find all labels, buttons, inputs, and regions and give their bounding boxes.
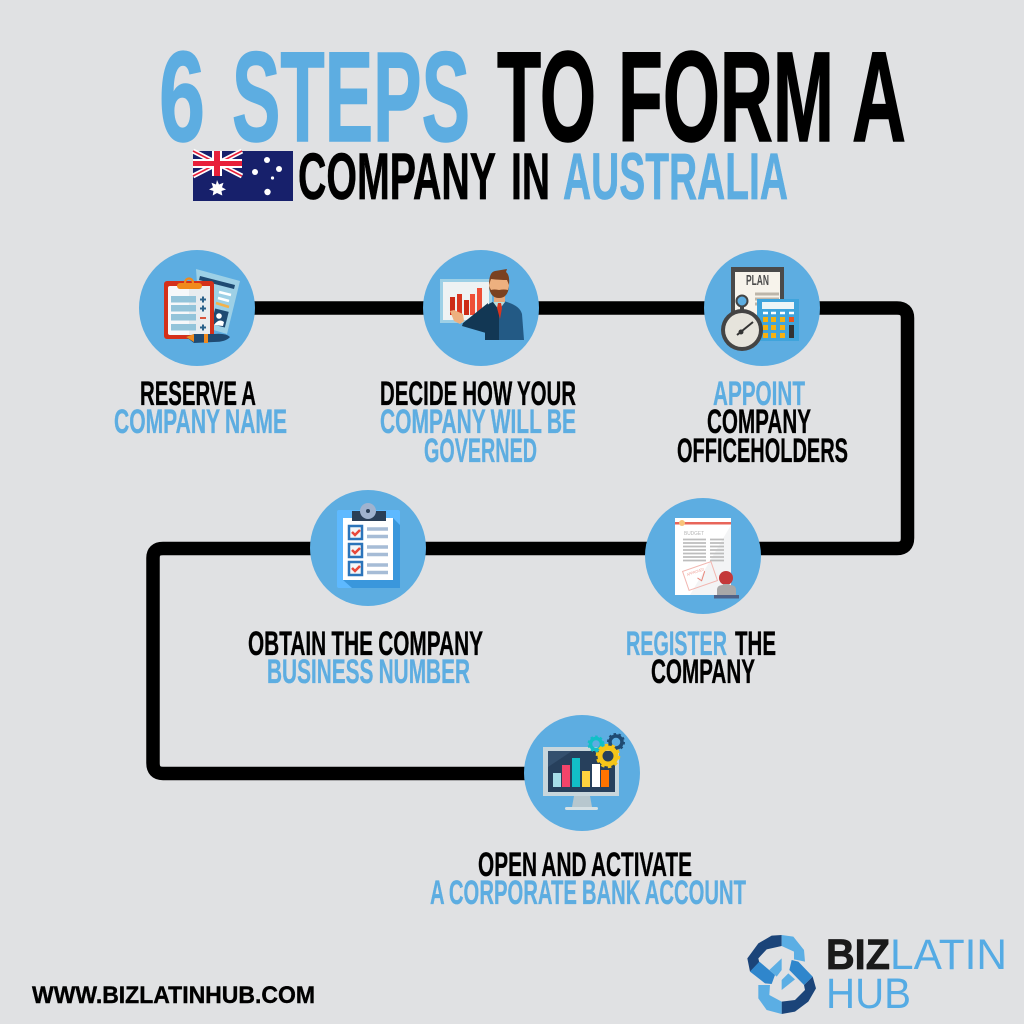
title: A (852, 26, 906, 169)
step 3 label: APPOINT (713, 375, 805, 413)
title: TO (497, 26, 596, 169)
icon: clipboard and id form (139, 250, 255, 366)
step 6: open and activate a corporate bank account (430, 715, 746, 912)
icon: approved budget document and stamp: BUDGET (684, 531, 705, 537)
connector track (153, 308, 908, 774)
step 1 label: COMPANY NAME (114, 403, 287, 441)
step 4 label: BUSINESS NUMBER (267, 653, 470, 691)
title: 6 (159, 26, 205, 169)
step 1 label (114, 375, 287, 441)
step 3: appoint company officeholders (677, 250, 848, 470)
icon: checklist clipboard (310, 490, 426, 606)
logo wordmark (826, 931, 1007, 1018)
step 5: register the company (626, 498, 776, 691)
title (159, 26, 906, 213)
step 6 label: A CORPORATE BANK ACCOUNT (430, 874, 746, 912)
title: COMPANY (298, 139, 496, 213)
step 2 label: DECIDE HOW YOUR (380, 375, 576, 413)
logo wordmark: BIZ (826, 931, 890, 979)
step 4 label: OBTAIN THE COMPANY (248, 625, 483, 663)
step 1: reserve a company name (114, 250, 287, 441)
step 6 label: OPEN AND ACTIVATE (478, 846, 692, 884)
step 4: obtain the company business number (248, 490, 483, 691)
logo: biz latin hub (747, 931, 1007, 1018)
icon: approved budget document and stamp: APPROVED (686, 566, 705, 577)
icon: plan, stopwatch and calculator: PLAN (746, 272, 769, 289)
step 1 label: RESERVE A (140, 375, 256, 413)
website url: WWW.BIZLATINHUB.COM (32, 982, 315, 1009)
icon: approved budget document and stamp (645, 498, 761, 614)
step 2 label: GOVERNED (424, 432, 537, 470)
step 5 label: COMPANY (651, 653, 755, 691)
step 5 label: REGISTER (626, 625, 727, 663)
step 3 label: COMPANY (707, 403, 811, 441)
icon: plan, stopwatch and calculator (704, 250, 820, 366)
logo wordmark: LATIN (890, 931, 1007, 979)
step 3 label (677, 375, 848, 470)
title: IN (511, 139, 550, 213)
step 2 label: COMPANY WILL BE (380, 403, 576, 441)
step 6 label (430, 846, 746, 912)
step 5 label (626, 625, 776, 691)
title: STEPS (232, 26, 470, 169)
logo wordmark: HUB (826, 970, 911, 1018)
step 2 label (380, 375, 576, 470)
step 3 label: OFFICEHOLDERS (677, 432, 848, 470)
icon: australian flag (193, 151, 293, 201)
logo mark (747, 935, 816, 1014)
step 4 label (248, 625, 483, 691)
icon: presenter with chart (423, 250, 539, 366)
icon: monitor with bar chart and gears (524, 715, 640, 831)
step 2: decide how your company will be governed (380, 250, 576, 470)
step 5 label: THE (735, 625, 776, 663)
title: AUSTRALIA (563, 139, 788, 213)
title: FORM (618, 26, 834, 169)
